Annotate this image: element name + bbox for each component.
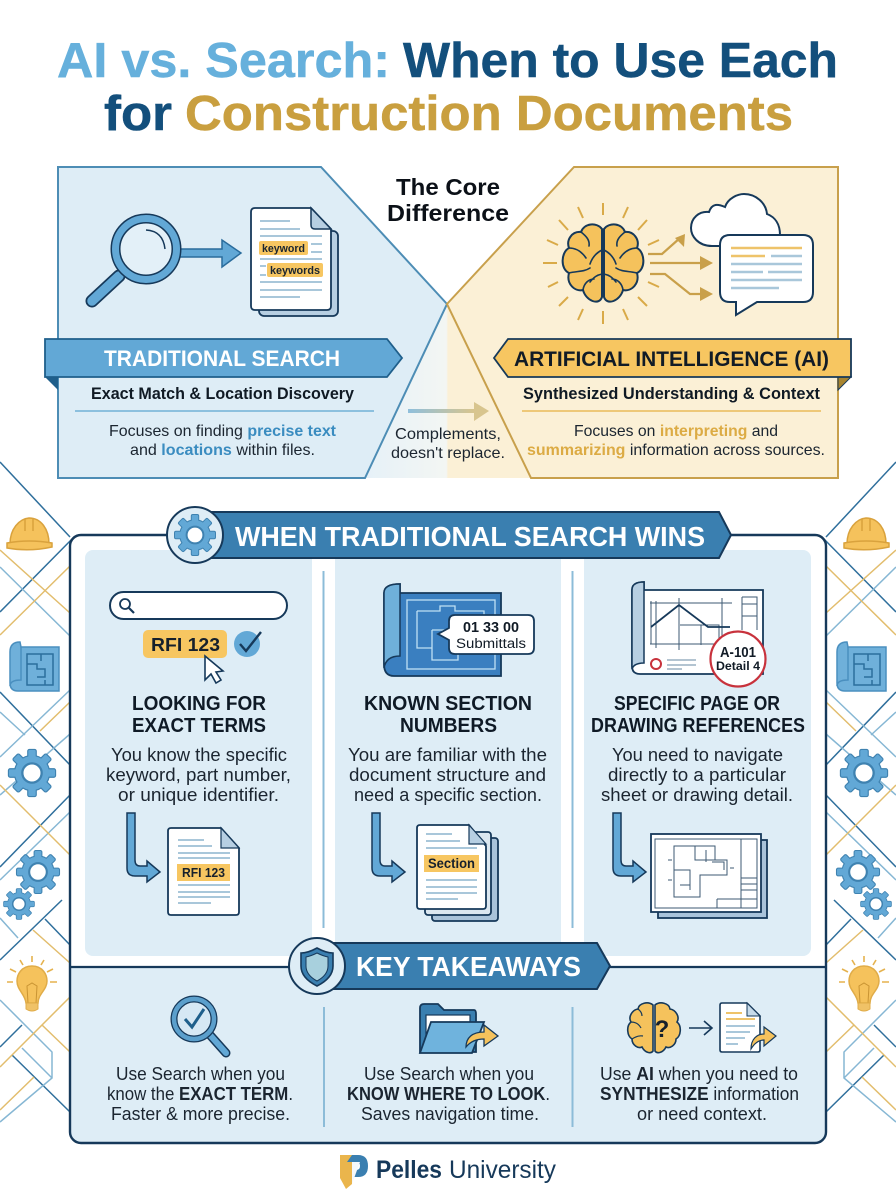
card text: You are familiar with the (348, 744, 547, 765)
card text: or unique identifier. (118, 784, 279, 805)
text (600, 1064, 799, 1124)
description: Focuses on finding precise text (109, 423, 337, 440)
panel: center complement area (365, 304, 531, 478)
icon: floor plan sheet (651, 834, 767, 918)
heading: the core difference: Difference (387, 200, 509, 226)
main panel (70, 535, 826, 1143)
text: SYNTHESIZE information (600, 1084, 799, 1104)
text (107, 1064, 293, 1124)
callout: section label: 01 33 00 (463, 620, 519, 636)
card heading (364, 693, 532, 737)
logo: Pelles University (340, 1155, 556, 1189)
callout: A-101 detail: Detail 4 (716, 661, 761, 673)
ribbon: artificial intelligence (494, 339, 851, 390)
icon: left hard hat (7, 518, 52, 550)
divider (322, 571, 324, 928)
callout: A-101 detail: A-101 (720, 645, 756, 661)
icon: left gear pair (4, 851, 59, 919)
card text: keyword, part number, (106, 764, 291, 785)
icon: drawing sheet (632, 582, 763, 674)
arrow (372, 813, 405, 882)
icon: right hard hat (844, 518, 889, 550)
icon: right blueprint (837, 642, 886, 691)
icon: left bulb (7, 956, 57, 1011)
icon: section document stack (417, 825, 498, 921)
background pattern: left (0, 462, 74, 1122)
icon: right gear (841, 750, 887, 796)
text: KNOW WHERE TO LOOK. (347, 1084, 550, 1104)
badge: RFI 123 (143, 630, 227, 658)
heading: the core difference (387, 174, 509, 226)
icon: section document stack: Section (428, 856, 475, 871)
takeaway 1 (107, 999, 293, 1124)
card heading: KNOWN SECTION (364, 693, 532, 715)
title: for (104, 87, 172, 141)
callout: section label: Submittals (456, 636, 526, 651)
text: complements: Complements, (395, 426, 501, 443)
icon: brain with rays (543, 203, 659, 324)
text: or need context. (637, 1104, 767, 1124)
text: Use Search when you (364, 1064, 534, 1084)
icon: brain question: ? (655, 1016, 669, 1043)
card text: You need to navigate (612, 744, 783, 765)
logo: Pelles University: Pelles (376, 1156, 442, 1184)
title: When to Use Each (403, 34, 838, 88)
heading: the core difference: The Core (396, 174, 500, 200)
text: Saves navigation time. (361, 1104, 539, 1124)
badge: RFI 123: RFI 123 (151, 634, 220, 655)
icon: gear (175, 515, 215, 555)
text: Use Search when you (116, 1064, 285, 1084)
description (109, 423, 337, 459)
text: Faster & more precise. (111, 1104, 290, 1124)
description (527, 423, 825, 459)
panel: artificial intelligence (447, 167, 851, 478)
ribbon: traditional search (45, 339, 402, 390)
icon: speech bubble (720, 235, 813, 315)
arrow (613, 813, 646, 882)
icon: check (234, 631, 261, 657)
banner: when traditional search wins (167, 507, 731, 563)
icon: cursor (205, 656, 223, 683)
icon: RFI document: RFI 123 (182, 865, 225, 880)
icon: document with keywords: keyword (262, 243, 305, 255)
logo: Pelles University: University (449, 1156, 556, 1184)
text: Use AI when you need to (600, 1064, 798, 1084)
card heading: DRAWING REFERENCES (591, 715, 805, 737)
banner: when traditional search wins: WHEN TRADITIONAL SEARCH WINS (235, 521, 705, 552)
divider (323, 1007, 325, 1127)
icon: folder with arrow (420, 1004, 498, 1053)
icon: right bulb (839, 956, 889, 1011)
background pattern: right (822, 462, 896, 1122)
icon: right gear pair (837, 851, 891, 919)
icon: left gear (9, 750, 55, 796)
ribbon: artificial intelligence: ARTIFICIAL INTELLIGENCE (AI) (514, 347, 829, 371)
takeaway 2 (347, 1004, 550, 1124)
icon: cloud (691, 194, 780, 246)
title: AI vs. Search: (57, 34, 390, 88)
icon: arrows from brain (648, 234, 713, 301)
ribbon: traditional search: TRADITIONAL SEARCH (104, 346, 340, 371)
callout: A-101 detail (710, 632, 766, 686)
icon: summary document (720, 1003, 776, 1052)
description: Focuses on interpreting and (574, 423, 778, 440)
subheading: Synthesized Understanding & Context (523, 384, 820, 403)
icon: arrow (689, 1021, 712, 1035)
takeaway 3 (600, 1003, 799, 1124)
card heading (591, 693, 805, 737)
icon: logo mark (340, 1155, 368, 1189)
icon: brain question (628, 1003, 680, 1053)
card text: directly to a particular (608, 764, 786, 785)
card heading: SPECIFIC PAGE OR (614, 693, 780, 715)
callout: section label (438, 615, 534, 654)
subheading: Exact Match & Location Discovery (91, 384, 355, 403)
card text: You know the specific (111, 744, 287, 765)
panel: traditional search (45, 167, 447, 478)
description: and locations within files. (130, 442, 315, 459)
icon: left blueprint (10, 642, 59, 691)
card 2: section numbers (335, 550, 561, 956)
text: complements (391, 426, 505, 462)
card text: document structure and (349, 764, 546, 785)
icon: magnifier check (174, 999, 226, 1053)
card heading: LOOKING FOR (132, 693, 267, 715)
card 3: drawing references (584, 550, 811, 956)
icon: magnifier with arrow (92, 218, 241, 301)
description: summarizing information across sources. (527, 442, 825, 459)
card text (348, 744, 547, 805)
icon: shield (301, 948, 333, 986)
banner: key takeaways: KEY TAKEAWAYS (356, 951, 581, 982)
card text (601, 744, 793, 805)
card heading: EXACT TERMS (132, 715, 266, 737)
card text: sheet or drawing detail. (601, 784, 793, 805)
text: know the EXACT TERM. (107, 1084, 293, 1104)
icon: RFI document (168, 828, 239, 915)
card text (106, 744, 291, 805)
text (347, 1064, 550, 1124)
icon: document with keywords: keywords (270, 265, 320, 277)
card heading: NUMBERS (400, 715, 497, 737)
icon: blueprint (384, 584, 501, 676)
title: Construction Documents (185, 87, 793, 141)
icon: document with keywords (251, 208, 338, 316)
text: complements: doesn't replace. (391, 445, 505, 462)
icon: search bar (110, 592, 287, 619)
card heading (132, 693, 267, 737)
title (57, 34, 838, 141)
divider (572, 1007, 574, 1127)
divider (572, 571, 574, 928)
card 1: exact terms (85, 550, 312, 956)
card text: need a specific section. (354, 784, 542, 805)
arrow: complements (408, 402, 489, 421)
banner: key takeaways (289, 938, 610, 994)
arrow (127, 813, 160, 882)
